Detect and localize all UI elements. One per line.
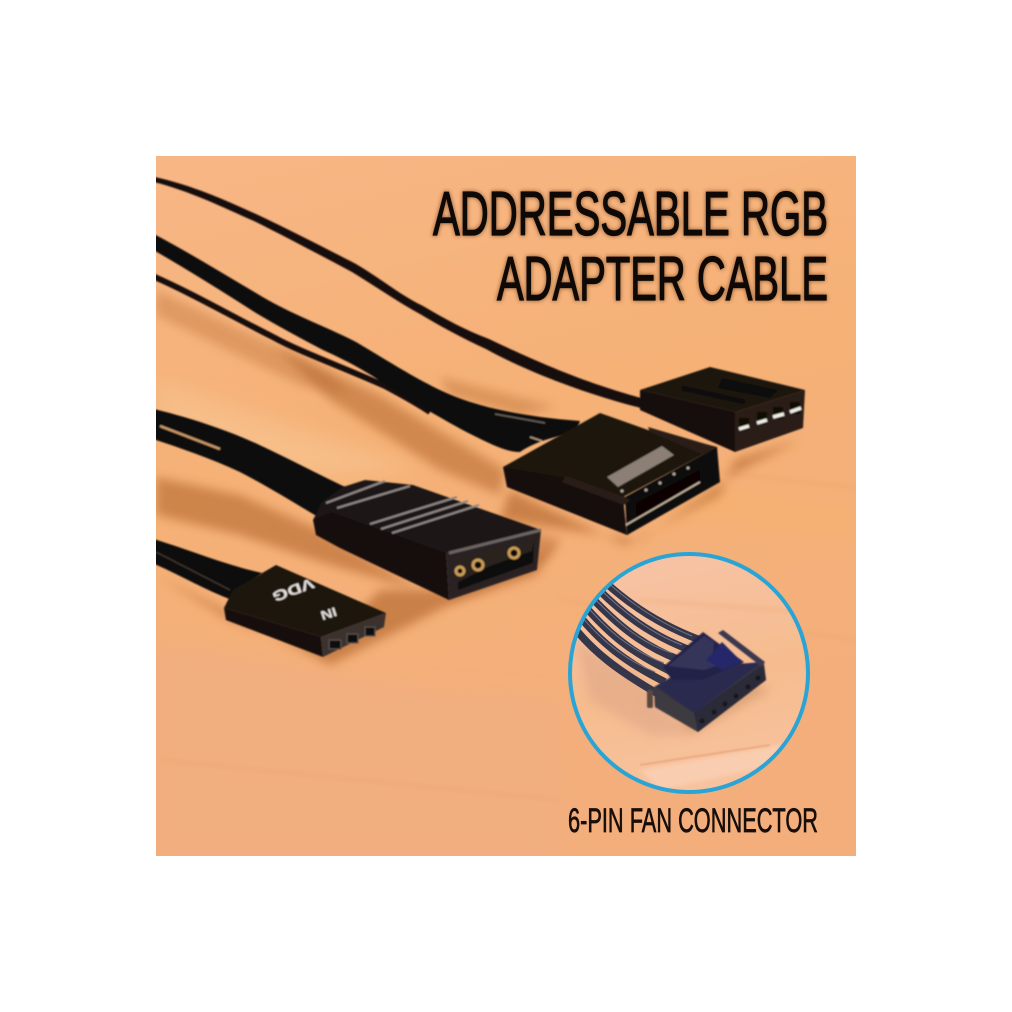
metal latch strip [607, 446, 674, 487]
printed label VDG: VDG [270, 575, 317, 605]
cable and connector shadows [156, 290, 800, 665]
cable: fourth wire bundle [150, 538, 262, 600]
connector: 4-pin fan header [640, 367, 805, 452]
caption: 6-PIN FAN CONNECTOR [568, 802, 818, 840]
title text [432, 190, 827, 302]
connector: large flat fan plug [503, 413, 720, 535]
connector: 3-pin IN header [224, 565, 386, 657]
cable: single top wire [150, 176, 645, 409]
printed label IN: IN [319, 604, 338, 622]
title glow [430, 188, 830, 304]
inset connector body [647, 630, 766, 732]
cable: second wire bundle [150, 232, 580, 452]
cable: third wire bundle [156, 408, 346, 516]
title glow: ADAPTER CABLE [497, 245, 828, 314]
title text: ADAPTER CABLE [497, 245, 828, 314]
panel: wooden photo background [150, 156, 856, 856]
connector: RGB 3-pin plug [313, 480, 541, 600]
inset ring [570, 554, 808, 792]
inset circle: 6-pin fan connector photo [570, 554, 808, 792]
inset pin holes [700, 676, 760, 724]
socket opening [458, 545, 534, 590]
gold pins [456, 548, 519, 575]
contact pins [620, 466, 690, 492]
raised ridges [326, 481, 479, 533]
title [430, 188, 830, 304]
infographic canvas [156, 156, 856, 856]
ribbon wires [570, 582, 700, 695]
pin holes [739, 402, 801, 430]
